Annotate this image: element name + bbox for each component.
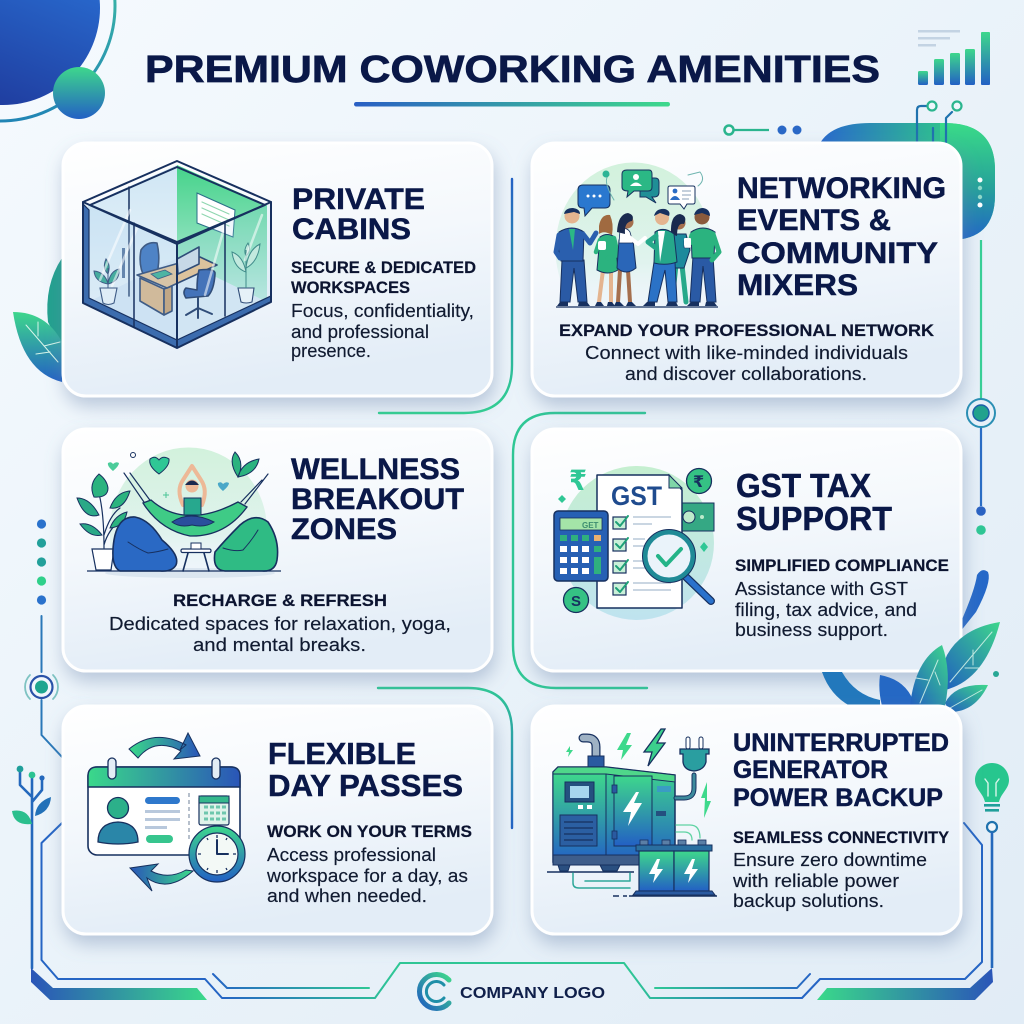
hammock — [124, 473, 268, 536]
user avatar — [98, 798, 138, 844]
decoration: left node and connector — [25, 616, 62, 757]
right plant — [232, 243, 260, 303]
description: Focus, confidentiality, — [291, 301, 474, 321]
logo text: COMPANY LOGO — [460, 985, 605, 1002]
panel: wellness breakout zones — [63, 429, 492, 671]
table — [181, 543, 211, 571]
chat bubble blue — [578, 185, 610, 216]
description: Ensure zero downtime — [733, 850, 927, 870]
heading: UNINTERRUPTED — [733, 729, 949, 757]
panel: private cabins — [63, 143, 492, 396]
heading: ZONES — [291, 513, 397, 546]
company logo — [419, 974, 605, 1009]
small calendar — [199, 796, 229, 825]
panel: networking events — [532, 143, 961, 396]
subheading: EXPAND YOUR PROFESSIONAL NETWORK — [559, 321, 935, 340]
title: PREMIUM COWORKING AMENITIES — [145, 49, 880, 91]
description — [266, 845, 468, 906]
icon: GST documents — [554, 464, 714, 620]
card background — [63, 429, 492, 671]
panel: generator power backup — [532, 706, 961, 934]
clock — [189, 826, 245, 882]
desk — [140, 278, 164, 315]
beanbag green — [214, 518, 278, 571]
description: and mental breaks. — [193, 635, 366, 655]
magnifier — [642, 530, 711, 601]
subheading: SECURE & DEDICATED — [291, 258, 476, 277]
decoration: bottom circuit lines — [31, 823, 993, 1000]
batteries — [613, 840, 717, 896]
glass front — [83, 202, 177, 348]
chat bubble green — [622, 170, 659, 203]
logo mark — [419, 974, 449, 1009]
id lines — [145, 793, 189, 843]
heading: PRIVATE — [292, 183, 425, 216]
front chair — [184, 270, 215, 298]
description: and when needed. — [267, 886, 427, 906]
description — [585, 343, 908, 384]
heading: BREAKOUT — [291, 483, 464, 516]
hearts and leaf — [108, 452, 259, 498]
card background — [63, 143, 492, 396]
figure 6 — [684, 208, 719, 306]
plant — [77, 474, 130, 570]
description — [291, 301, 474, 361]
subheading — [291, 258, 476, 297]
description: presence. — [291, 341, 371, 361]
card background — [532, 706, 961, 934]
wires — [573, 873, 630, 888]
icon: networking people — [556, 163, 719, 307]
calculator: GET — [582, 521, 599, 530]
title underline — [354, 102, 670, 106]
description — [732, 850, 927, 911]
card background — [532, 143, 961, 396]
subheading: RECHARGE & REFRESH — [173, 591, 387, 610]
description: and discover collaborations. — [625, 364, 867, 384]
figure 3 — [614, 213, 645, 306]
beanbag blue — [113, 517, 177, 571]
decoration: left circuit tree — [12, 766, 51, 968]
card background — [63, 706, 492, 934]
subheading: SIMPLIFIED COMPLIANCE — [735, 556, 949, 575]
heading — [291, 453, 464, 546]
decoration: top-left circles — [0, 0, 115, 121]
decoration: left leaves — [13, 258, 62, 382]
figure 1 — [556, 208, 596, 306]
decoration: blue swoosh right — [960, 570, 989, 632]
description — [109, 614, 451, 655]
document: GST — [611, 481, 662, 511]
left plant — [94, 259, 119, 304]
heading — [733, 729, 949, 812]
decoration: bottom-right leaves — [822, 622, 1000, 712]
description — [735, 579, 917, 640]
description: with reliable power — [732, 871, 899, 891]
card background — [532, 429, 961, 671]
description: Dedicated spaces for relaxation, yoga, — [109, 614, 451, 634]
green bolts — [566, 729, 711, 818]
icon: bar chart — [918, 30, 990, 85]
laptop — [177, 247, 199, 274]
panel: GST tax support — [532, 429, 961, 671]
document — [597, 475, 682, 608]
heading: SUPPORT — [736, 500, 892, 537]
description: filing, tax advice, and — [735, 600, 917, 620]
heading: MIXERS — [737, 269, 858, 302]
icon: generator — [547, 729, 717, 896]
generator body — [547, 767, 675, 872]
icon: calendar and clock — [88, 733, 245, 891]
frame — [83, 161, 271, 348]
chat bubble profile — [668, 186, 695, 209]
decoration: centre connectors — [378, 179, 647, 828]
dollar coin — [564, 588, 588, 612]
heading: CABINS — [292, 213, 411, 246]
bottom arrow — [130, 864, 193, 891]
decoration: blob behind networking card — [819, 102, 995, 240]
calendar — [88, 758, 240, 855]
decoration: right connector line and node — [967, 240, 995, 535]
figure 5 — [671, 214, 694, 302]
decoration: left dots — [37, 519, 46, 605]
heading: GST TAX — [736, 467, 871, 504]
description: and professional — [291, 322, 429, 342]
heading: EVENTS & — [737, 204, 891, 237]
description: Connect with like-minded individuals — [585, 343, 908, 363]
description: business support. — [735, 620, 888, 640]
rupee coin: ₹ — [693, 472, 704, 491]
description: Assistance with GST — [735, 579, 908, 599]
icon: glass cabin — [83, 161, 271, 348]
description: Access professional — [267, 845, 436, 865]
calculator — [554, 511, 608, 581]
rupee symbol: ₹ — [569, 464, 587, 497]
heading: WELLNESS — [291, 453, 460, 486]
heading: GENERATOR — [733, 756, 888, 784]
heading — [292, 183, 425, 246]
heading: NETWORKING — [737, 172, 946, 205]
top arrow — [129, 733, 200, 759]
back chair — [140, 243, 167, 278]
banknote — [681, 503, 714, 531]
description: backup solutions. — [733, 891, 884, 911]
heading: DAY PASSES — [268, 768, 463, 803]
dollar coin: S — [571, 593, 581, 610]
rupee coin — [686, 468, 712, 494]
subheading: SEAMLESS CONNECTIVITY — [733, 828, 950, 847]
exhaust pipe — [583, 738, 604, 767]
heading — [268, 736, 463, 803]
subheading: WORKSPACES — [291, 278, 410, 297]
figure 4 — [643, 209, 678, 306]
heading: COMMUNITY — [737, 237, 938, 270]
panel: flexible day passes — [63, 706, 492, 934]
power plug — [676, 737, 709, 798]
heading: POWER BACKUP — [733, 784, 943, 812]
icon: wellness — [77, 447, 281, 578]
heading — [736, 467, 892, 537]
heading: FLEXIBLE — [268, 736, 416, 771]
icon: light bulb — [975, 763, 1009, 968]
circuit node above networking card — [724, 126, 802, 134]
description: workspace for a day, as — [266, 866, 468, 886]
subheading: WORK ON YOUR TERMS — [267, 822, 472, 841]
figure 2 — [595, 215, 618, 306]
yoga person — [172, 466, 214, 526]
heading — [737, 172, 946, 302]
